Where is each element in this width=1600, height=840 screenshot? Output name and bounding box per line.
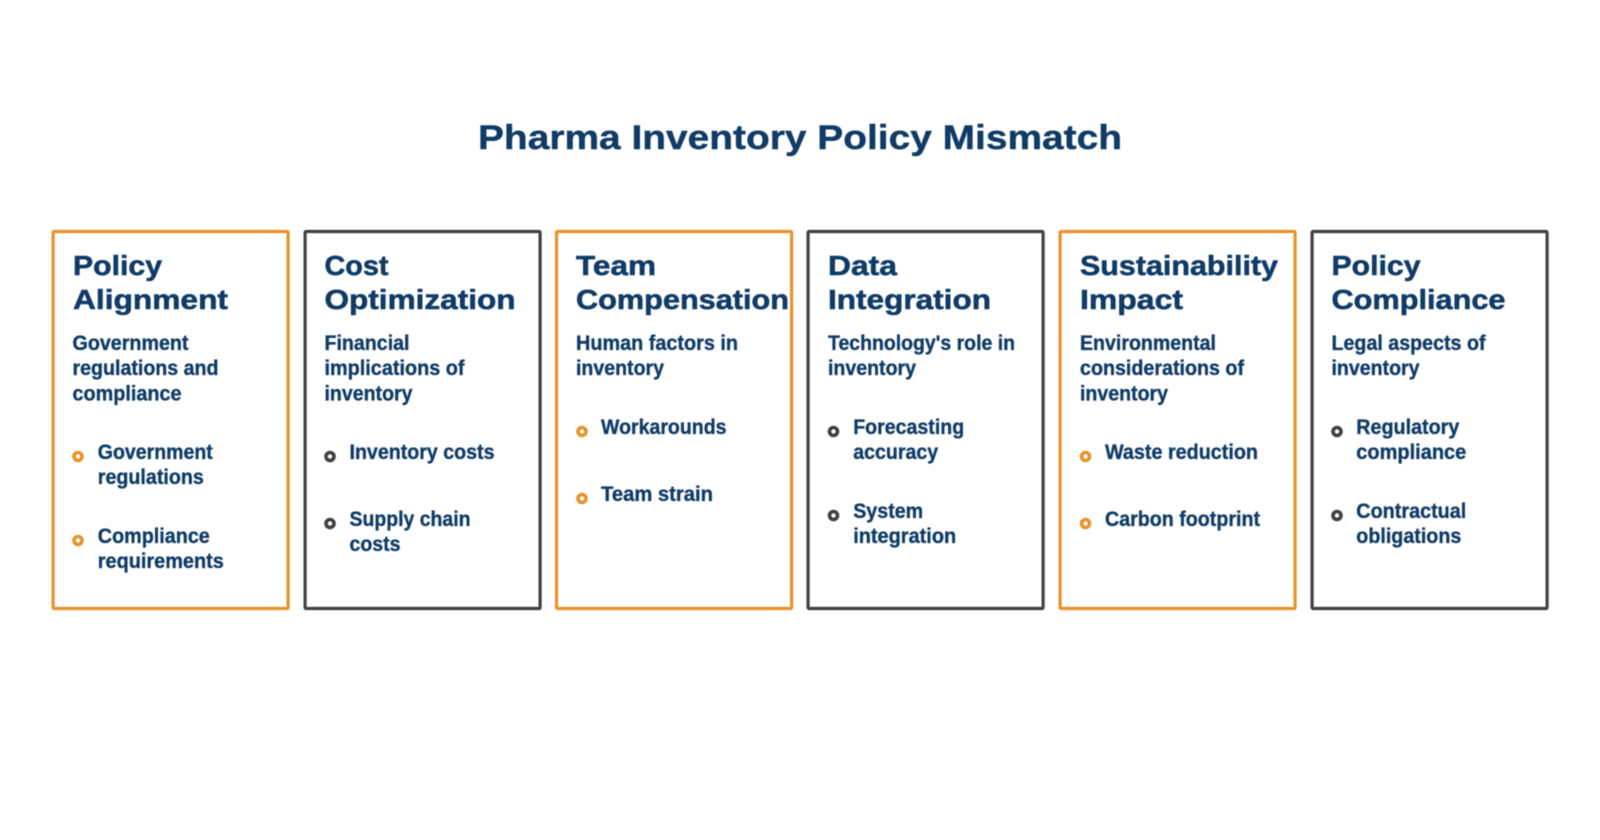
description: Policy Compliance: Legal aspects of bbox=[1332, 332, 1486, 355]
bullet: System integration: System bbox=[853, 500, 923, 523]
title: Pharma Inventory Policy Mismatch bbox=[478, 119, 1122, 157]
heading: Team Compensation bbox=[576, 250, 789, 315]
bullet: System integration: integration bbox=[853, 525, 956, 548]
panel: Team Compensation bbox=[557, 232, 792, 608]
description: Cost Optimization: inventory bbox=[324, 382, 413, 406]
description: Team Compensation bbox=[576, 332, 738, 380]
description: Sustainability Impact bbox=[1080, 332, 1245, 406]
heading: Policy Alignment bbox=[73, 250, 228, 315]
panel: Sustainability Impact bbox=[1060, 232, 1295, 608]
description: Team Compensation: inventory bbox=[576, 357, 664, 380]
bullet: Forecasting accuracy bbox=[830, 416, 964, 464]
bullet: Workarounds: Workarounds bbox=[601, 416, 726, 439]
heading: Cost Optimization bbox=[324, 250, 516, 315]
bullet: Regulatory compliance: compliance bbox=[1356, 441, 1466, 464]
bullet: Government regulations: Government bbox=[98, 441, 213, 464]
description: Policy Alignment: compliance bbox=[72, 382, 182, 406]
bullet: Contractual obligations: Contractual bbox=[1356, 500, 1466, 523]
description: Policy Alignment: Government bbox=[72, 332, 188, 355]
description: Team Compensation: Human factors in bbox=[576, 332, 738, 355]
heading: Cost Optimization: Optimization bbox=[324, 284, 516, 315]
description: Policy Compliance: inventory bbox=[1332, 357, 1420, 380]
bullet: Forecasting accuracy: Forecasting bbox=[853, 416, 964, 439]
bullet: Forecasting accuracy: accuracy bbox=[853, 441, 938, 464]
bullet: Inventory costs: Inventory costs bbox=[350, 441, 494, 464]
heading: Data Integration: Data bbox=[828, 250, 897, 281]
bullet: Supply chain costs: costs bbox=[350, 533, 400, 556]
description: Sustainability Impact: Environmental bbox=[1080, 332, 1216, 355]
heading: Policy Compliance: Policy bbox=[1332, 250, 1421, 281]
bullet: Contractual obligations: obligations bbox=[1356, 525, 1461, 548]
description: Data Integration: inventory bbox=[828, 357, 916, 380]
description: Sustainability Impact: inventory bbox=[1080, 382, 1168, 406]
description: Sustainability Impact: considerations of bbox=[1080, 357, 1245, 380]
bullet: Waste reduction: Waste reduction bbox=[1105, 441, 1258, 464]
bullet: Compliance requirements: Compliance bbox=[98, 525, 210, 548]
heading: Policy Compliance: Compliance bbox=[1332, 284, 1506, 315]
heading: Sustainability Impact: Sustainability bbox=[1080, 250, 1278, 281]
bullet: Carbon footprint: Carbon footprint bbox=[1105, 508, 1260, 531]
bullet: Government regulations: regulations bbox=[98, 466, 204, 489]
description: Data Integration bbox=[828, 332, 1015, 380]
heading: Data Integration: Integration bbox=[828, 284, 991, 315]
description: Cost Optimization: Financial bbox=[324, 332, 410, 355]
bullet: Contractual obligations bbox=[1333, 500, 1466, 548]
description: Data Integration: Technology's role in bbox=[828, 332, 1015, 355]
heading: Sustainability Impact bbox=[1080, 250, 1278, 315]
panel: Policy Alignment bbox=[53, 232, 288, 608]
description: Policy Compliance bbox=[1332, 332, 1486, 380]
heading: Data Integration bbox=[828, 250, 991, 315]
bullet: Supply chain costs bbox=[326, 508, 470, 556]
heading: Policy Alignment: Alignment bbox=[73, 284, 228, 315]
heading: Team Compensation: Compensation bbox=[576, 284, 789, 315]
description: Cost Optimization: implications of bbox=[324, 357, 465, 380]
heading: Cost Optimization: Cost bbox=[324, 250, 388, 281]
panel: Policy Compliance bbox=[1312, 232, 1547, 608]
bullet: Supply chain costs: Supply chain bbox=[350, 508, 470, 531]
panel: Cost Optimization bbox=[305, 232, 540, 608]
heading: Policy Alignment: Policy bbox=[73, 250, 162, 281]
description: Policy Alignment: regulations and bbox=[72, 357, 218, 380]
bullet: Regulatory compliance: Regulatory bbox=[1356, 416, 1460, 439]
bullet: Compliance requirements bbox=[74, 525, 224, 573]
heading: Team Compensation: Team bbox=[576, 250, 656, 281]
panel: Data Integration bbox=[808, 232, 1043, 608]
bullet: System integration bbox=[830, 500, 956, 548]
bullet: Team strain: Team strain bbox=[601, 483, 713, 506]
description: Cost Optimization bbox=[324, 332, 465, 406]
heading: Sustainability Impact: Impact bbox=[1080, 284, 1183, 315]
bullet: Compliance requirements: requirements bbox=[98, 550, 224, 573]
description: Policy Alignment bbox=[72, 332, 218, 406]
heading: Policy Compliance bbox=[1332, 250, 1506, 315]
bullet: Regulatory compliance bbox=[1333, 416, 1466, 464]
bullet: Government regulations bbox=[74, 441, 213, 489]
